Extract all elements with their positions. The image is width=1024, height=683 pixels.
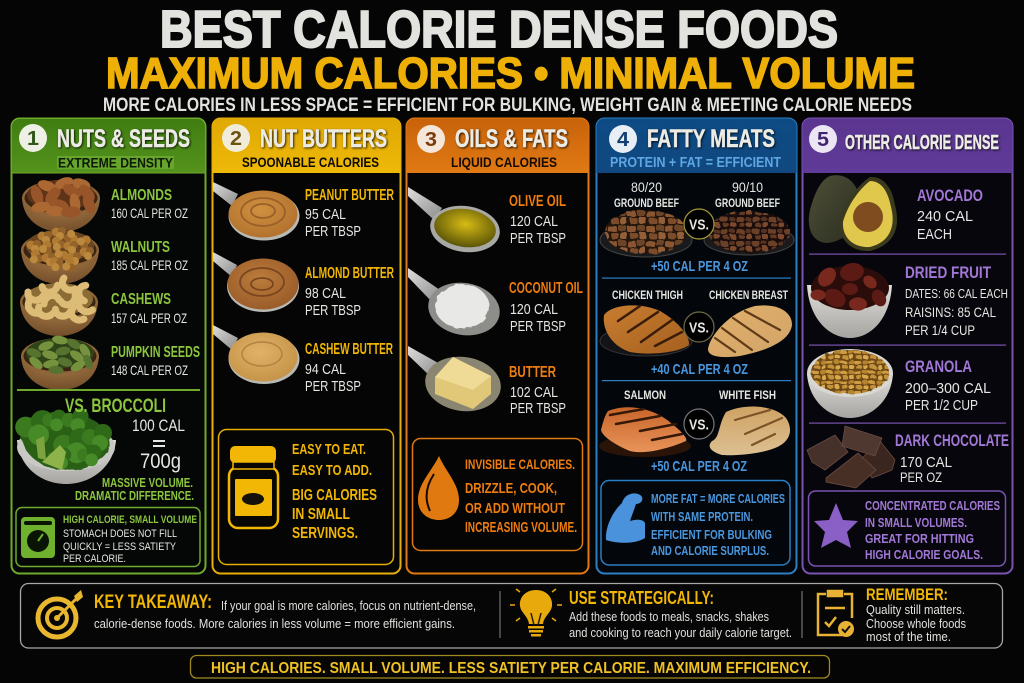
food: butter spoon [408, 346, 504, 416]
text: invisible calories: INVISIBLE CALORIES. [465, 456, 575, 472]
label: granola: 200–300 CAL [905, 380, 991, 397]
label: peanut butter [305, 187, 394, 240]
panel: nuts and seeds [12, 118, 206, 574]
subheading: extreme density: EXTREME DENSITY [58, 154, 174, 170]
text: more fat: EFFICIENT FOR BULKING [651, 527, 772, 542]
labels: chicken: CHICKEN THIGH [612, 288, 683, 302]
labels: fish: SALMON [624, 388, 666, 402]
food: broccoli bowl [15, 408, 116, 484]
text: invisible calories: DRIZZLE, COOK, [465, 480, 557, 497]
food: dark chocolate [807, 426, 895, 488]
badge: vs fish [684, 409, 714, 439]
label: pumpkin seeds: PUMPKIN SEEDS [111, 344, 200, 361]
label: cashew butter [305, 341, 393, 395]
heading: nuts and seeds: NUTS & SEEDS [57, 125, 190, 153]
food: 90/10 ground beef [704, 211, 794, 255]
text: concentrated calories: HIGH CALORIE GOALS. [865, 547, 983, 562]
callout box: invisible calories [412, 438, 582, 550]
text: stomach note: QUICKLY = LESS SATIETY [63, 541, 177, 553]
text: remember: most of the time. [866, 629, 951, 644]
label: coconut oil: 120 CAL [510, 301, 558, 318]
label: almond butter: ALMOND BUTTER [305, 265, 394, 282]
food: 80/20 ground beef [600, 210, 692, 257]
label: walnuts: WALNUTS [111, 239, 170, 256]
text: use strategically: USE STRATEGICALLY: [569, 588, 714, 608]
labels: chicken: CHICKEN BREAST [709, 288, 788, 302]
callout box: concentrated calories [808, 491, 1006, 566]
text: key takeaway: KEY TAKEAWAY: [94, 592, 212, 613]
badge 1 [19, 124, 47, 152]
labels: ground beef [614, 179, 780, 210]
text: use strategically: Add these foods to meals, snacks, shakes [569, 609, 769, 624]
label: almonds: 160 CAL PER OZ [111, 205, 188, 221]
label: cashews: 157 CAL PER OZ [111, 310, 187, 326]
label: avocado: AVOCADO [917, 186, 983, 205]
text: invisible calories: INCREASING VOLUME. [465, 519, 577, 536]
label: cashews [111, 291, 187, 326]
badge 5: 5 [817, 129, 829, 151]
label: almond butter [305, 265, 394, 319]
labels: fish: WHITE FISH [719, 388, 776, 402]
label: almond butter: 98 CAL [305, 285, 346, 302]
text: easy to eat: EASY TO ADD. [292, 462, 372, 479]
label: walnuts [111, 239, 188, 273]
badge 2: 2 [230, 128, 242, 150]
text: remember: Quality still matters. [866, 602, 965, 617]
label: cashew butter: CASHEW BUTTER [305, 341, 393, 358]
banner: bottom slogan: HIGH CALORIES. SMALL VOLUME. LESS SATIETY PER CALORIE. MAXIMUM EFFICIENCY. [211, 660, 811, 677]
label: granola: PER 1/2 CUP [905, 397, 978, 414]
text: more fat: MORE FAT = MORE CALORIES [651, 491, 785, 506]
text: invisible calories: OR ADD WITHOUT [465, 500, 565, 517]
subtitle: MAXIMUM CALORIES • MINIMAL VOLUME [106, 49, 915, 98]
label: dried fruit: RAISINS: 85 CAL [905, 304, 996, 320]
subheading: spoonable calories: SPOONABLE CALORIES [242, 154, 379, 170]
label: dark chocolate: 170 CAL [900, 454, 952, 471]
icon: light bulb [510, 589, 562, 636]
label: walnuts: 185 CAL PER OZ [111, 257, 188, 273]
heading: nut butters: NUT BUTTERS [260, 125, 387, 153]
text: key takeaway [94, 592, 476, 631]
text: concentrated calories [865, 498, 1000, 562]
heading: oils and fats: OILS & FATS [455, 125, 568, 153]
labels: ground beef: GROUND BEEF [614, 196, 679, 210]
badge 2 [222, 124, 250, 152]
label: almonds: ALMONDS [111, 187, 172, 204]
text: massive volume: DRAMATIC DIFFERENCE. [75, 488, 194, 503]
text: stomach note [63, 514, 197, 565]
labels: chicken [612, 288, 788, 302]
label: peanut butter: PEANUT BUTTER [305, 187, 394, 204]
badge 3: 3 [425, 129, 437, 151]
label: cashew butter: 94 CAL [305, 361, 346, 378]
text: concentrated calories: GREAT FOR HITTING [865, 531, 974, 546]
food: cashew butter spoon [213, 325, 300, 384]
text: key takeaway: If your goal is more calories, focus on nutrient-dense, [221, 598, 476, 613]
callout: 100 cal = 700g [132, 416, 185, 473]
text: easy to eat: IN SMALL [292, 506, 350, 523]
text: massive volume: MASSIVE VOLUME. [102, 475, 193, 490]
food: peanut butter spoon [213, 182, 300, 240]
label: granola: GRANOLA [905, 357, 972, 376]
food: chicken breast [708, 305, 792, 357]
label: pumpkin seeds [111, 344, 200, 378]
panel: nut butters [212, 118, 400, 574]
label: peanut butter: 95 CAL [305, 206, 346, 223]
food: dried fruit bowl [807, 261, 892, 338]
label: avocado: 240 CAL [917, 208, 973, 225]
label: olive oil: PER TBSP [510, 230, 566, 247]
food: salmon [599, 407, 691, 457]
label: coconut oil [509, 280, 583, 335]
heading: fatty meats: FATTY MEATS [647, 125, 775, 153]
text: massive volume [75, 475, 194, 503]
subheading: protein plus fat: PROTEIN + FAT = EFFICIENT [610, 154, 781, 171]
label: dark chocolate [895, 431, 1009, 485]
label: dried fruit [905, 263, 1008, 338]
callout box: more fat [601, 480, 790, 565]
label: olive oil: OLIVE OIL [509, 193, 566, 210]
food: almond butter spoon [213, 252, 299, 312]
text: remember [866, 585, 966, 644]
text: remember: REMEMBER: [866, 585, 948, 604]
text: use strategically [569, 588, 792, 640]
panel: other calorie dense [802, 118, 1012, 574]
food: pumpkin seeds bowl [21, 334, 99, 390]
label: dark chocolate: PER OZ [900, 469, 942, 485]
icon: star [814, 503, 858, 548]
label: cashews: CASHEWS [111, 291, 171, 308]
text: stomach note: STOMACH DOES NOT FILL [63, 528, 177, 540]
label: butter [509, 364, 566, 417]
title: BEST CALORIE DENSE FOODS [160, 1, 838, 59]
text: concentrated calories: IN SMALL VOLUMES. [865, 515, 967, 530]
label: avocado [917, 186, 983, 243]
text: more fat [651, 491, 785, 558]
label: butter: PER TBSP [510, 400, 566, 417]
icon: target [38, 590, 83, 637]
text: use strategically: and cooking to reach your daily calorie target. [569, 625, 792, 640]
callout box: high calorie small volume [16, 508, 200, 566]
badge 3 [417, 125, 445, 153]
label: coconut oil: PER TBSP [510, 318, 566, 335]
food: chicken thigh [600, 305, 692, 356]
icon: kitchen scale [21, 517, 55, 558]
text: easy to eat: BIG CALORIES [292, 487, 377, 504]
text: key takeaway: calorie-dense foods. More calories in less volume = more efficient gains. [94, 616, 455, 631]
food: coconut oil spoon [408, 268, 504, 341]
text: stomach note: PER CALORIE. [63, 553, 126, 565]
icon: jar [229, 446, 278, 528]
food: granola bowl [807, 349, 893, 418]
panel: fatty meats [596, 118, 796, 574]
badge 4 [609, 125, 637, 153]
callout box: easy to eat [218, 430, 394, 564]
text: more fat: WITH SAME PROTEIN. [651, 509, 753, 524]
callout: 100 cal = 700g: 700g [140, 450, 181, 473]
labels: ground beef: 80/20 [631, 179, 662, 195]
label: almond butter: PER TBSP [305, 302, 361, 319]
food: cashews bowl [20, 278, 98, 336]
icon: clipboard [818, 591, 854, 637]
label: butter: 102 CAL [510, 384, 558, 401]
icon: oil drop [418, 456, 459, 520]
callout: 100 cal = 700g: 100 CAL [132, 416, 185, 435]
text: invisible calories [465, 456, 577, 536]
text: easy to eat: SERVINGS. [292, 525, 358, 542]
food: olive oil spoon [408, 187, 503, 257]
food: walnuts bowl [21, 227, 99, 284]
text: more fat: AND CALORIE SURPLUS. [651, 543, 769, 558]
label: olive oil [509, 193, 566, 247]
label: peanut butter: PER TBSP [305, 223, 361, 240]
badge: vs chicken [684, 312, 714, 342]
banner: bottom slogan [190, 656, 830, 678]
food: white fish [710, 406, 790, 455]
badge 4: 4 [617, 129, 630, 151]
stat: +50 cal fish: +50 CAL PER 4 OZ [651, 458, 747, 475]
label: olive oil: 120 CAL [510, 213, 558, 230]
label: pumpkin seeds: 148 CAL PER OZ [111, 362, 188, 378]
label: coconut oil: COCONUT OIL [509, 280, 583, 297]
panel: oils and fats [406, 118, 588, 574]
heading: vs broccoli: VS. BROCCOLI [65, 396, 166, 417]
label: butter: BUTTER [509, 364, 556, 381]
label: avocado: EACH [917, 226, 952, 243]
stat: +40 cal chicken: +40 CAL PER 4 OZ [651, 361, 748, 378]
label: almonds [111, 187, 188, 221]
labels: ground beef: 90/10 [732, 179, 763, 195]
footer panel: takeaways [20, 584, 1002, 648]
text: remember: Choose whole foods [866, 616, 966, 631]
subheading: liquid calories: LIQUID CALORIES [451, 154, 557, 170]
food: almonds bowl [22, 175, 100, 232]
label: cashew butter: PER TBSP [305, 378, 361, 395]
badge 1: 1 [27, 128, 39, 150]
badge 5 [809, 125, 837, 153]
text: stomach note: HIGH CALORIE, SMALL VOLUME [63, 514, 197, 526]
icon: flexed bicep [606, 493, 645, 543]
label: dried fruit: DRIED FRUIT [905, 263, 991, 282]
text: easy to eat: EASY TO EAT. [292, 441, 366, 458]
text: easy to eat [292, 441, 377, 542]
labels: ground beef: GROUND BEEF [715, 196, 780, 210]
label: granola [905, 357, 991, 414]
labels: fish [624, 388, 776, 402]
label: dried fruit: PER 1/4 CUP [905, 322, 975, 338]
stat: +50 cal beef: +50 CAL PER 4 OZ [651, 258, 748, 275]
badge: vs beef [684, 209, 714, 239]
food: avocado [809, 175, 897, 251]
